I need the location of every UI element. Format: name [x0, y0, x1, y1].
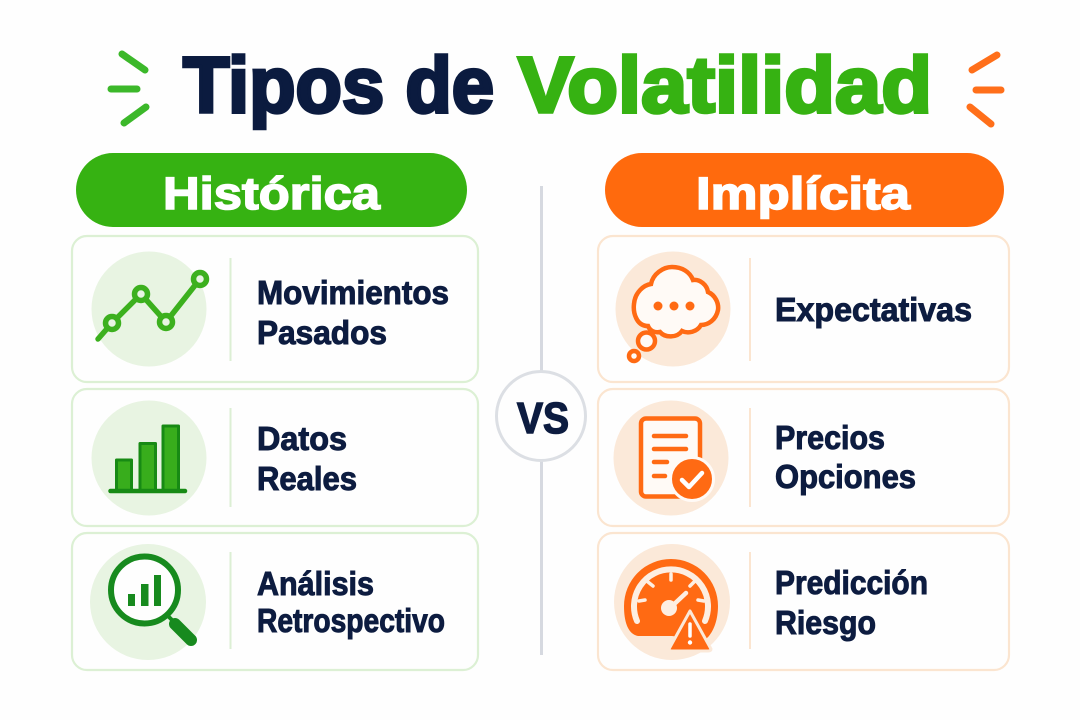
icon: magnifying glass — [111, 556, 191, 640]
label: Movimientos Pasados: Pasados — [257, 314, 387, 351]
card: Predicción Riesgo — [598, 533, 1009, 670]
title: Volatilidad — [518, 40, 932, 129]
VS badge: VS — [517, 394, 569, 443]
heading: Implícita: Implícita — [696, 168, 911, 219]
icon: gauge with warning — [624, 559, 718, 651]
label: Expectativas: Expectativas — [775, 291, 972, 328]
label: Predicción Riesgo: Predicción — [775, 564, 928, 601]
label: Análisis Retrospectivo — [257, 565, 445, 639]
panel: Histórica — [72, 153, 478, 670]
label: Precios Opciones: Precios — [775, 419, 885, 456]
card: Movimientos Pasados — [72, 236, 478, 382]
title: Tipos de — [183, 40, 494, 129]
icon: line chart — [98, 272, 206, 339]
icon: green accent rays — [111, 54, 146, 123]
card: Datos Reales — [72, 389, 478, 526]
label: Datos Reales: Datos — [257, 420, 347, 457]
label: Predicción Riesgo — [775, 564, 928, 641]
heading: Implícita — [605, 153, 1004, 227]
heading: Histórica: Histórica — [163, 168, 381, 219]
label: Datos Reales: Reales — [257, 460, 357, 497]
label: Análisis Retrospectivo: Análisis — [257, 565, 374, 602]
icon: document with check — [641, 418, 714, 500]
label: Movimientos Pasados — [257, 274, 449, 351]
label: Precios Opciones: Opciones — [775, 458, 916, 495]
VS badge — [496, 372, 586, 460]
card: Análisis Retrospectivo — [72, 533, 478, 670]
label: Datos Reales — [257, 420, 357, 497]
label: Análisis Retrospectivo: Retrospectivo — [257, 602, 445, 639]
heading: Histórica — [76, 153, 467, 227]
title — [183, 40, 932, 129]
icon: bar chart — [110, 426, 185, 491]
label: Predicción Riesgo: Riesgo — [775, 604, 876, 641]
divider line — [540, 186, 543, 655]
card: Expectativas — [598, 236, 1009, 382]
panel: Implícita — [598, 153, 1009, 670]
label: Precios Opciones — [775, 419, 916, 495]
icon: thought bubble — [629, 267, 718, 361]
label: Movimientos Pasados: Movimientos — [257, 274, 449, 311]
icon: orange accent rays — [970, 55, 1001, 124]
card: Precios Opciones — [598, 389, 1009, 526]
